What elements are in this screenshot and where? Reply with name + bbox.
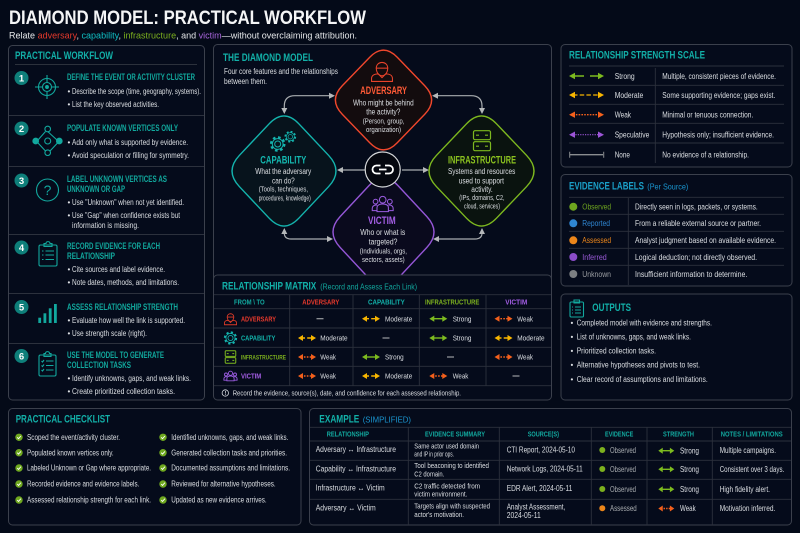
matrix row: capability: Moderate: [517, 334, 545, 343]
intro text: between them.: [224, 77, 267, 86]
heading: practical checklist: PRACTICAL CHECKLIST: [16, 414, 110, 426]
example row 4: actor's motivation.: [414, 510, 464, 519]
heading: example: (SIMPLIFIED): [363, 414, 411, 424]
capability text: [255, 154, 311, 203]
matrix column headers: ADVERSARY: [302, 298, 339, 307]
step number 1: [14, 71, 28, 85]
matrix row: adversary: Strong: [453, 314, 471, 323]
capability text: What the adversary: [255, 167, 311, 176]
matrix column headers: INFRASTRUCTURE: [425, 298, 479, 307]
example row 1: Same actor used domain: [414, 441, 479, 450]
center link hub: [365, 152, 400, 187]
step 3 text: Use "Gap" when confidence exists but: [72, 211, 181, 220]
intro text: [224, 67, 338, 86]
checklist right column: Updated as new evidence arrives.: [171, 496, 267, 505]
step 5 text: •: [68, 329, 70, 338]
icon: diamond vertices: [33, 126, 62, 156]
scale row: speculative: Hypothesis only; insufficient evidence.: [662, 131, 774, 140]
example row 2: [316, 461, 784, 479]
subtitle: Relate adversary, capability, infrastructure, and victim—without overclaiming attribution.: [9, 30, 357, 42]
matrix row: infrastructure: [225, 351, 533, 363]
checklist right column: Documented assumptions and limitations.: [171, 464, 290, 473]
example table header: RELATIONSHIP: [327, 430, 369, 439]
step 3 text: UNKNOWN OR GAP: [67, 184, 125, 194]
step 5: [14, 300, 185, 338]
step 6 text: [67, 350, 191, 396]
example row 3: Observed: [610, 485, 636, 494]
scale row: strong: [569, 72, 776, 81]
icon: target: [35, 75, 59, 99]
capability text: can do?: [272, 176, 295, 185]
example table header: SOURCE(S): [528, 430, 559, 439]
matrix row: victim: Weak: [320, 372, 336, 381]
heading: the diamond model: THE DIAMOND MODEL: [223, 52, 313, 64]
capability text: procedures, knowledge): [259, 196, 311, 203]
adversary text: organization): [366, 125, 401, 134]
example row 4: Targets align with suspected: [414, 502, 490, 511]
checklist left column: Populated known vertices only.: [27, 448, 114, 457]
label: observed: Directly seen in logs, packets, or systems.: [635, 202, 758, 212]
checklist right column: Generated collection tasks and priorities.: [171, 448, 287, 457]
step 3 text: [67, 174, 184, 230]
example row 4: Motivation inferred.: [720, 504, 775, 513]
scale row: strong: Strong: [615, 72, 635, 81]
step 2 text: •: [68, 151, 70, 160]
example row 2: Capability ↔ Infrastructure: [316, 464, 396, 473]
checklist left column: Recorded evidence and evidence labels.: [27, 480, 139, 489]
label: unknown: Unknown: [582, 270, 611, 279]
label: inferred: [569, 253, 757, 262]
checklist left column: Assessed relationship strength for each link.: [27, 496, 151, 505]
step 2 text: •: [68, 138, 70, 147]
example row 1: Observed: [610, 446, 636, 455]
matrix footnote: Record the evidence, source(s), date, and confidence for each assessed relationship.: [233, 388, 461, 397]
scale row: weak: [569, 111, 753, 120]
adversary text: (Person, group,: [363, 116, 404, 125]
example row 4: 2024-05-11: [507, 511, 541, 520]
step 6 text: USE THE MODEL TO GENERATE: [67, 350, 164, 360]
scale row: moderate: Moderate: [615, 91, 644, 100]
scale row: speculative: Speculative: [615, 131, 650, 140]
example row 1: [316, 441, 776, 459]
label: unknown: [569, 270, 747, 279]
vertex: victim: [333, 178, 434, 286]
outputs list: Prioritized collection tasks.: [577, 347, 656, 356]
adversary text: Who might be behind: [353, 98, 414, 108]
step 1: [14, 71, 201, 109]
panel: practical workflow: [8, 46, 204, 400]
step number 4: [14, 240, 28, 254]
example row 4: Assessed: [610, 504, 637, 513]
outputs list: Clear record of assumptions and limitations.: [577, 375, 708, 384]
matrix row: infrastructure: Strong: [385, 353, 404, 362]
checklist left column: Labeled Unknown or Gap where appropriate.: [27, 464, 151, 473]
step 5 text: Evaluate how well the link is supported.: [72, 316, 185, 325]
victim text: Who or what is: [360, 228, 405, 237]
step number 2: [14, 122, 28, 136]
scale row: strong: Multiple, consistent pieces of evidence.: [662, 72, 776, 81]
step number 1: 1: [19, 73, 25, 84]
step number 6: 6: [19, 351, 24, 362]
step 4 text: •: [68, 278, 70, 287]
matrix column headers: [234, 298, 527, 307]
matrix row: adversary: Weak: [517, 314, 533, 323]
icon: hooded adversary: [372, 62, 392, 81]
example row 2: Tool beaconing to identified: [414, 461, 489, 470]
step 2 text: Add only what is supported by evidence.: [72, 138, 188, 147]
step 5 text: •: [68, 316, 70, 325]
infrastructure text: used to support: [459, 176, 505, 185]
step 5 text: ASSESS RELATIONSHIP STRENGTH: [67, 302, 178, 312]
heading: strength scale: RELATIONSHIP STRENGTH SCALE: [569, 49, 705, 61]
example row 3: victim environment.: [414, 490, 467, 499]
heading: outputs: OUTPUTS: [592, 302, 631, 314]
step 1 text: Describe the scope (time, geography, systems).: [72, 87, 201, 96]
step 5 text: Use strength scale (right).: [72, 329, 147, 338]
scale row: none: No evidence of a relationship.: [662, 150, 749, 159]
step 1 text: •: [68, 87, 70, 96]
heading: practical workflow: PRACTICAL WORKFLOW: [15, 50, 113, 62]
example row 1: Strong: [680, 446, 699, 456]
example row 2: Network Logs, 2024-05-11: [507, 464, 583, 474]
step 4 text: •: [68, 265, 70, 274]
example row 2: C2 domain.: [414, 470, 444, 479]
step 6 text: Identify unknowns, gaps, and weak links.: [72, 374, 191, 383]
panel: example simplified: [310, 408, 792, 525]
icon: question mark: [36, 179, 58, 201]
step 6 text: COLLECTION TASKS: [67, 360, 131, 370]
example row 4: Weak: [680, 504, 696, 513]
step number 3: [14, 174, 28, 188]
step number 3: 3: [19, 176, 24, 187]
matrix column headers: FROM \ TO: [234, 298, 265, 307]
intro text: Four core features and the relationships: [224, 67, 338, 76]
step 4 text: RELATIONSHIP: [67, 251, 115, 261]
example table header: STRENGTH: [663, 430, 694, 439]
icon: clipboard list: [39, 242, 57, 266]
step 3 text: LABEL UNKNOWN VERTICES AS: [67, 174, 167, 184]
example row 3: Infrastructure ↔ Victim: [316, 484, 385, 493]
step 6 text: •: [68, 387, 70, 396]
heading: relationship matrix: RELATIONSHIP MATRIX: [222, 280, 317, 292]
label: unknown: Insufficient information to determine.: [635, 270, 747, 279]
heading: evidence labels: (Per Source): [647, 182, 689, 191]
vertex: infrastructure: [429, 116, 534, 226]
icon: gears: [271, 132, 295, 151]
matrix row: capability: CAPABILITY: [241, 334, 275, 343]
infrastructure text: activity.: [471, 185, 493, 194]
scale row: moderate: Some supporting evidence; gaps exist.: [662, 91, 775, 100]
infrastructure text: [448, 154, 516, 210]
label: observed: [569, 202, 758, 212]
step 5 text: [67, 302, 185, 338]
checklist right column: Reviewed for alternative hypotheses.: [171, 480, 276, 489]
matrix row: capability: Moderate: [320, 334, 348, 343]
step 3 text: Use "Unknown" when not yet identified.: [72, 198, 184, 207]
matrix footnote: !: [225, 391, 227, 397]
scale row: speculative: [569, 131, 774, 140]
matrix row: victim: Weak: [453, 372, 469, 381]
step 4 text: [67, 241, 179, 287]
victim text: VICTIM: [368, 215, 396, 227]
vertex: capability: [232, 116, 336, 226]
step number 4: 4: [19, 243, 25, 254]
example table header: EVIDENCE SUMMARY: [425, 430, 485, 439]
matrix row: capability: [225, 332, 545, 344]
example row 3: [316, 481, 770, 499]
capability text: CAPABILITY: [260, 154, 307, 166]
example table header: [327, 430, 783, 439]
matrix row: victim: VICTIM: [241, 372, 261, 381]
checklist right column: Identified unknowns, gaps, and weak links.: [171, 433, 288, 442]
example row 3: High fidelity alert.: [720, 485, 770, 494]
example row 3: EDR Alert, 2024-05-11: [507, 484, 573, 493]
checklist left column: Scoped the event/activity cluster.: [27, 433, 120, 442]
step number 5: [14, 300, 28, 314]
step 4 text: Note dates, methods, and limitations.: [72, 278, 179, 287]
example row 4: Analyst Assessment,: [507, 502, 565, 512]
heading: relationship matrix: [222, 280, 417, 292]
icon: clipboard checks: [39, 352, 56, 376]
victim text: sectors, assets): [362, 255, 405, 264]
step 6: [14, 349, 191, 396]
victim text: (Individuals, orgs,: [360, 246, 407, 255]
step 2 text: [67, 123, 189, 160]
example row 3: Strong: [680, 485, 699, 494]
label: reported: [569, 219, 761, 228]
example row 1: Adversary ↔ Infrastructure: [316, 445, 396, 454]
scale row: none: None: [615, 150, 630, 159]
outputs list: Completed model with evidence and strengths.: [577, 318, 712, 327]
step number 2: 2: [19, 124, 24, 135]
heading: evidence labels: EVIDENCE LABELS: [569, 180, 644, 192]
matrix row: infrastructure: Weak: [320, 353, 336, 362]
panel: evidence labels: [561, 174, 792, 286]
panel: relationship strength scale: [561, 44, 792, 167]
icon: strength bars: [38, 304, 57, 323]
step 1 text: List the key observed activities.: [72, 100, 159, 109]
step 3: [14, 174, 184, 230]
infrastructure text: INFRASTRUCTURE: [448, 154, 516, 166]
label: assessed: Assessed: [582, 236, 611, 245]
step 4 text: RECORD EVIDENCE FOR EACH: [67, 241, 160, 251]
panel: the diamond model: [214, 44, 552, 286]
matrix row: victim: [224, 371, 520, 381]
example row 1: Multiple campaigns.: [720, 446, 776, 455]
scale row: moderate: [569, 91, 775, 100]
label: reported: From a reliable external source or partner.: [635, 219, 761, 228]
outputs list: •: [570, 318, 574, 327]
outputs list: •: [570, 347, 574, 356]
label: inferred: Logical deduction; not directly observed.: [635, 253, 757, 262]
step number 5: 5: [19, 302, 25, 313]
adversary text: the activity?: [366, 108, 401, 117]
matrix row: adversary: [224, 314, 533, 325]
scale row: weak: Weak: [615, 111, 632, 120]
matrix row: adversary: ADVERSARY: [241, 314, 276, 323]
label: reported: Reported: [582, 219, 610, 228]
step number 6: [14, 349, 28, 363]
heading: relationship matrix: (Record and Assess Each Link): [320, 282, 417, 291]
icon: users: [372, 196, 393, 212]
step 2 text: POPULATE KNOWN VERTICES ONLY: [67, 123, 178, 133]
infrastructure text: Systems and resources: [448, 167, 515, 176]
step 4: [14, 240, 179, 287]
outputs list: •: [570, 361, 574, 370]
label: inferred: Inferred: [582, 253, 607, 262]
matrix row: infrastructure: Weak: [517, 353, 533, 362]
victim text: [360, 215, 407, 264]
panel: relationship matrix: [214, 275, 552, 400]
arrows between vertices: [281, 93, 485, 242]
infrastructure text: cloud, services): [464, 201, 500, 210]
infrastructure text: (IPs, domains, C2,: [459, 193, 505, 202]
matrix row: victim: Moderate: [385, 372, 412, 381]
label: observed: Observed: [582, 202, 611, 212]
icon: outputs clipboard: [570, 300, 584, 317]
step 3 text: information is missing.: [72, 221, 139, 230]
capability text: (Tools, techniques,: [259, 185, 308, 194]
adversary text: [353, 85, 414, 134]
example row 1: and IP in prior ops.: [414, 450, 454, 459]
example table header: NOTES / LIMITATIONS: [721, 430, 783, 439]
outputs list: Alternative hypotheses and pivots to test.: [577, 361, 700, 370]
matrix column headers: VICTIM: [505, 298, 527, 307]
step 6 text: Create prioritized collection tasks.: [72, 387, 175, 396]
matrix row: adversary: Moderate: [385, 314, 412, 323]
outputs list: •: [570, 332, 574, 341]
example row 4: [316, 502, 775, 520]
step 4 text: Cite sources and label evidence.: [72, 265, 165, 274]
label: assessed: [569, 236, 776, 245]
example row 1: CTI Report, 2024-05-10: [507, 446, 575, 454]
label: assessed: Analyst judgment based on available evidence.: [635, 236, 776, 245]
heading: example: [319, 413, 411, 425]
step 3 text: •: [68, 211, 70, 220]
example table header: EVIDENCE: [605, 430, 633, 439]
example row 2: Observed: [610, 465, 636, 474]
example row 2: Strong: [680, 465, 699, 474]
step 3 text: •: [68, 198, 70, 207]
checklist right column: [159, 433, 290, 505]
step 6 text: •: [68, 374, 70, 383]
outputs list: [570, 318, 712, 384]
victim text: targeted?: [369, 238, 398, 247]
step 1 text: •: [68, 100, 70, 109]
icon: servers: [474, 131, 490, 151]
scale row: weak: Minimal or tenuous connection.: [662, 111, 753, 120]
scale row: none: [570, 150, 749, 159]
step 2: [14, 122, 189, 160]
adversary text: ADVERSARY: [360, 85, 407, 97]
matrix column headers: CAPABILITY: [368, 298, 405, 307]
step 2 text: Avoid speculation or filling for symmetry.: [72, 151, 189, 160]
heading: example: EXAMPLE: [319, 413, 359, 425]
example row 4: Adversary ↔ Victim: [316, 504, 376, 513]
vertex: adversary: [335, 50, 432, 150]
outputs list: List of unknowns, gaps, and weak links.: [577, 332, 691, 341]
matrix row: infrastructure: INFRASTRUCTURE: [241, 355, 286, 362]
step 1 text: DEFINE THE EVENT OR ACTIVITY CLUSTER: [67, 72, 195, 82]
step 1 text: [67, 72, 201, 109]
icon: question mark: ?: [44, 182, 52, 198]
outputs list: •: [570, 375, 574, 384]
panel: practical checklist: [8, 408, 301, 525]
example row 3: C2 traffic detected from: [414, 481, 480, 490]
matrix row: capability: Strong: [453, 334, 471, 343]
checklist left column: [15, 433, 151, 505]
panel: outputs: [561, 294, 792, 400]
title: DIAMOND MODEL: PRACTICAL WORKFLOW: [9, 7, 366, 29]
